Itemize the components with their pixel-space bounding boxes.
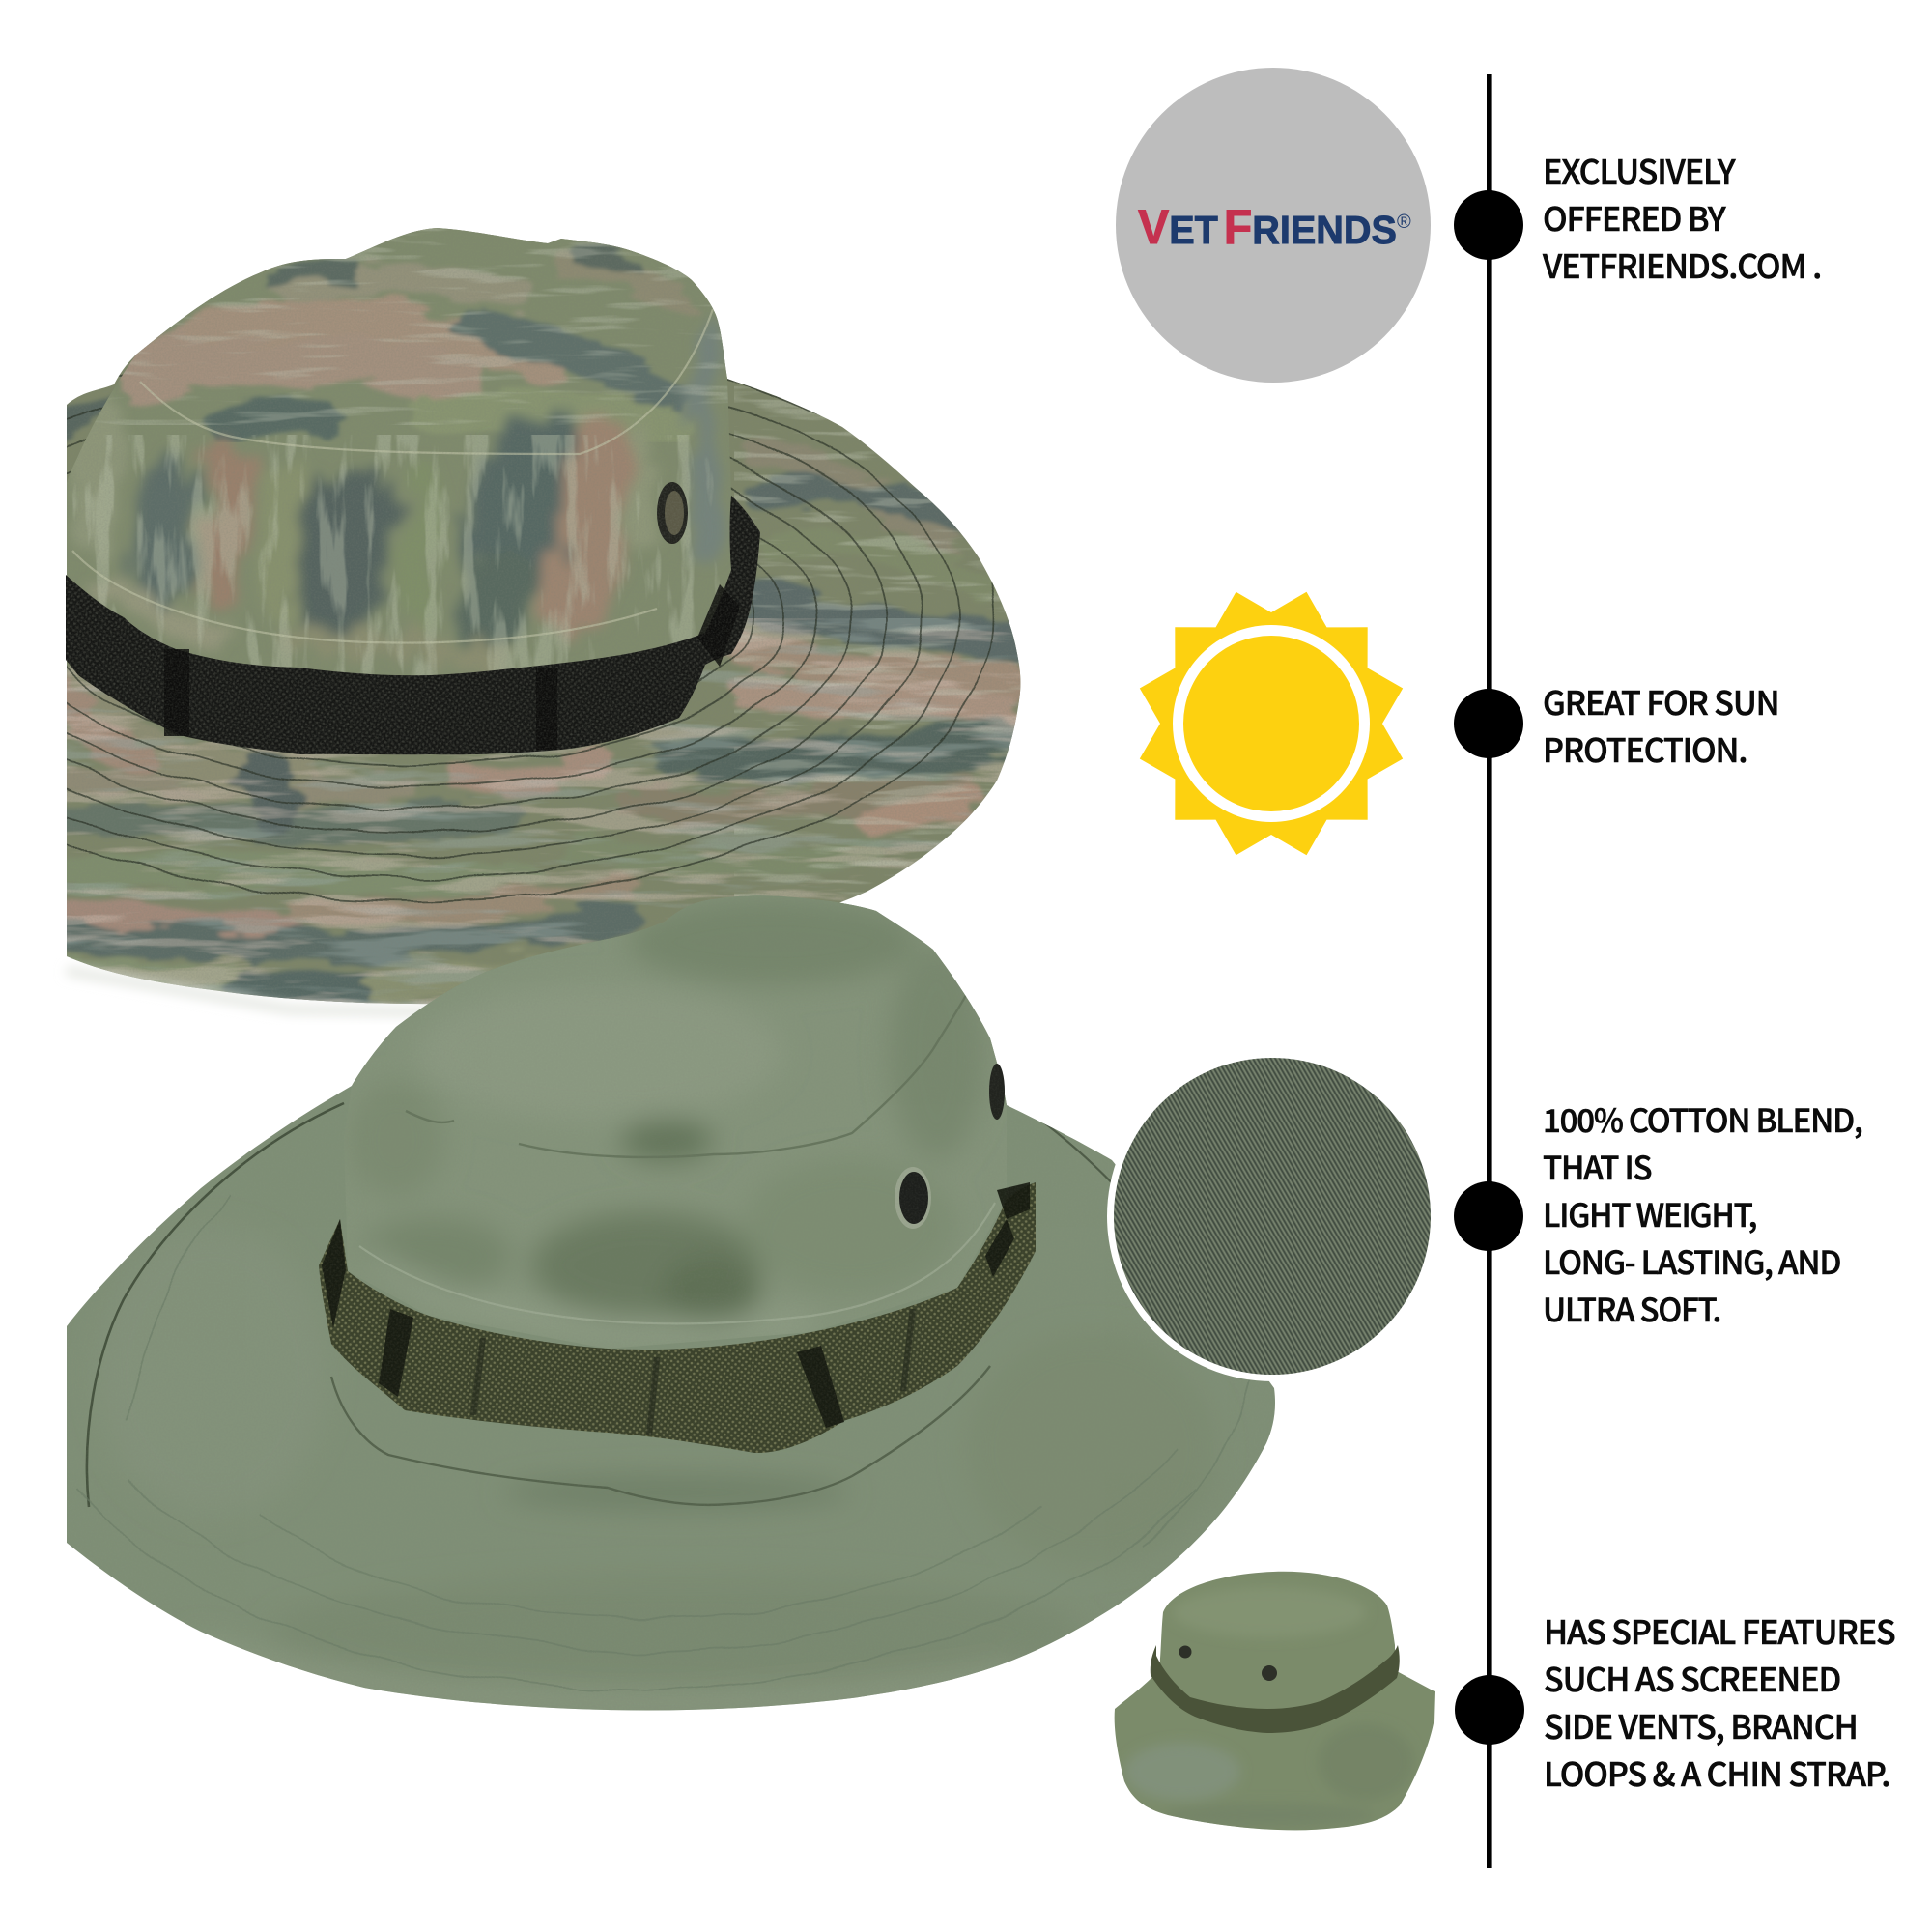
text: special features: SUCH AS SCREENED bbox=[1544, 1654, 1840, 1701]
small hat eyelets bbox=[1179, 1646, 1277, 1681]
timeline dot 4 bbox=[1455, 1675, 1524, 1745]
illustration layer bbox=[66, 68, 1524, 1868]
text: exclusively offered bbox=[1542, 146, 1821, 288]
green band bbox=[319, 1182, 1036, 1453]
text: special features: LOOPS & A CHIN STRAP. bbox=[1544, 1748, 1889, 1796]
text: exclusively offered: EXCLUSIVELY bbox=[1543, 146, 1735, 193]
green brim bbox=[67, 895, 1275, 1710]
text: cotton blend: ULTRA SOFT. bbox=[1543, 1285, 1720, 1331]
registered mark: ® bbox=[1397, 212, 1411, 233]
timeline line bbox=[1487, 74, 1492, 1868]
text: cotton blend: THAT IS bbox=[1543, 1143, 1651, 1189]
timeline dot 2 bbox=[1454, 689, 1523, 758]
camo brim bbox=[0, 222, 1034, 1014]
text: cotton blend bbox=[1543, 1095, 1862, 1331]
text: special features: SIDE VENTS, BRANCH bbox=[1544, 1701, 1858, 1748]
text: special features: HAS SPECIAL FEATURES bbox=[1544, 1606, 1895, 1654]
green brim stitching bbox=[87, 1101, 1169, 1507]
logo wordmark: VETFRIENDS bbox=[1138, 200, 1397, 254]
text: special features bbox=[1544, 1606, 1895, 1796]
camo band bbox=[66, 496, 760, 754]
text: sun protection: GREAT FOR SUN bbox=[1543, 677, 1779, 724]
text: sun protection bbox=[1543, 677, 1779, 772]
green crown bbox=[352, 895, 1007, 1345]
text: cotton blend: LONG- LASTING, AND bbox=[1543, 1237, 1840, 1284]
green crown seams bbox=[406, 995, 966, 1157]
camo eyelet bbox=[657, 482, 688, 544]
soft shadow beneath camo bbox=[67, 971, 444, 1012]
small hat band bbox=[1151, 1645, 1400, 1733]
green eyelets bbox=[895, 1064, 1005, 1229]
crown seams bbox=[72, 309, 713, 643]
timeline dot 1 bbox=[1454, 190, 1523, 260]
VetFriends logo badge bbox=[1116, 68, 1431, 383]
small hat: olive boonie front bbox=[1115, 1572, 1435, 1830]
camo grain bbox=[67, 273, 1019, 980]
fabric swatch bbox=[1107, 1051, 1437, 1381]
timeline dot 3 bbox=[1454, 1181, 1523, 1251]
text: exclusively offered: VETFRIENDS.COM . bbox=[1543, 241, 1821, 288]
brim stitching bbox=[67, 375, 995, 904]
text: cotton blend: 100% COTTON BLEND, bbox=[1543, 1095, 1862, 1142]
camo crown bbox=[67, 228, 731, 675]
text: cotton blend: LIGHT WEIGHT, bbox=[1543, 1190, 1756, 1236]
green grain bbox=[323, 1068, 1029, 1446]
hat: olive green boonie bbox=[58, 889, 1285, 1719]
hat: tiger-stripe camo boonie bbox=[0, 222, 1034, 1014]
text: sun protection: PROTECTION. bbox=[1543, 724, 1747, 772]
icon: sun bbox=[1140, 592, 1403, 855]
text: exclusively offered: OFFERED BY bbox=[1543, 193, 1725, 241]
